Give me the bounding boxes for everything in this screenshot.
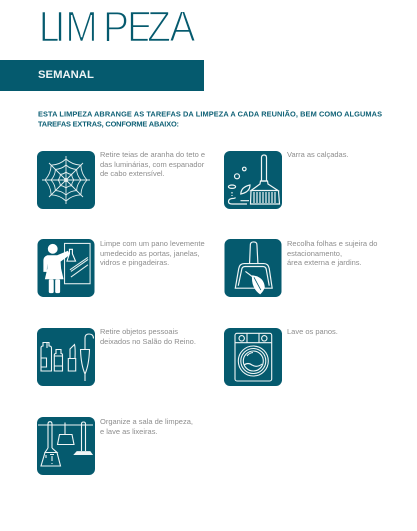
icon: dustpan and leaf [224, 239, 282, 297]
text: wipe doors and windows: umedecido as portas, janelas, [100, 249, 200, 258]
text: organize room: e lave as lixeiras. [100, 427, 158, 436]
intro text [38, 110, 382, 128]
icon: spider web [37, 151, 95, 209]
icon: personal objects [37, 328, 95, 386]
text: organize room: Organize a sala de limpeza, [100, 417, 193, 426]
text: personal objects: Retire objetos pessoais [100, 327, 178, 336]
text: wipe doors and windows: Limpe com um pano levemente [100, 239, 205, 248]
text: sweep: Varra as calçadas. [287, 150, 349, 159]
banner heading: SEMANAL [38, 69, 94, 81]
intro text: ESTA LIMPEZA ABRANGE AS TAREFAS DA LIMPEZA A CADA REUNIÃO, BEM COMO ALGUMAS [38, 110, 382, 118]
icon: broom [224, 151, 282, 209]
icon: cleaning room tools [37, 417, 95, 475]
banner: semanal [0, 60, 204, 91]
icon: person cleaning window [38, 239, 94, 297]
text: leaves and dirt [287, 239, 378, 267]
text: spider webs: de cabo extensível. [100, 169, 165, 178]
text: wipe doors and windows [100, 239, 205, 267]
icon: washing machine [224, 328, 282, 386]
text: leaves and dirt: área externa e jardins. [287, 258, 362, 267]
text: organize room [100, 417, 193, 436]
text: wipe doors and windows: vidros e pingadeiras. [100, 258, 169, 267]
text: personal objects: deixados no Salão do Reino. [100, 337, 196, 346]
text: spider webs [100, 150, 205, 178]
text: leaves and dirt: Recolha folhas e sujeira do [287, 239, 377, 248]
text: spider webs: Retire teias de aranha do teto e [100, 150, 205, 159]
text: spider webs: das luminárias, com espanador [100, 160, 204, 169]
text: personal objects [100, 327, 196, 346]
text: leaves and dirt: estacionamento, [287, 249, 342, 258]
intro text: TAREFAS EXTRAS, CONFORME ABAIXO: [38, 120, 179, 128]
text: wash cloths: Lave os panos. [287, 327, 338, 336]
